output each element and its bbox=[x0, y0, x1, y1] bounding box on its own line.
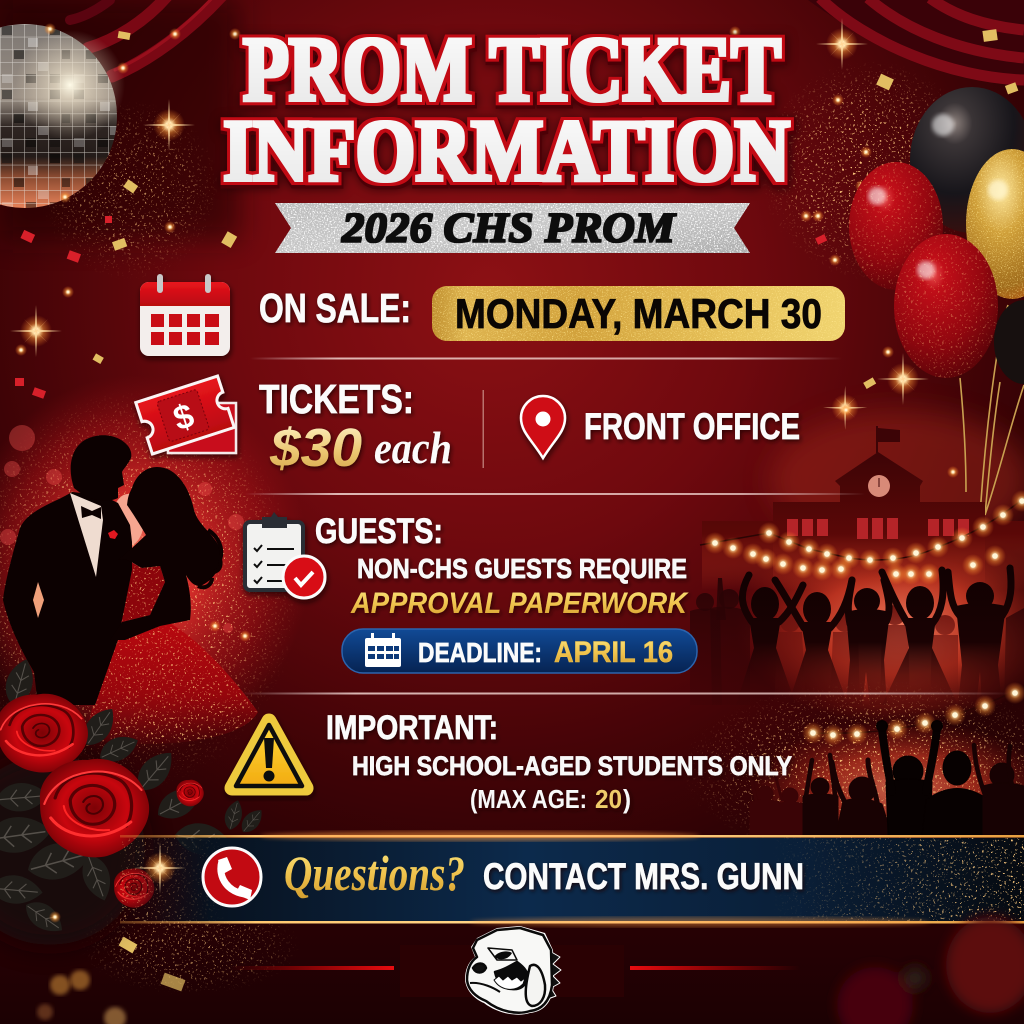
ticket price: $30 bbox=[269, 418, 362, 478]
icon: phone bbox=[203, 848, 261, 906]
guests requirement: NON-CHS GUESTS REQUIRE bbox=[357, 553, 687, 584]
header title bbox=[223, 18, 790, 200]
side figures bbox=[690, 578, 1024, 705]
date pill: MONDAY, MARCH 30 bbox=[455, 290, 822, 337]
on sale label: ON SALE: bbox=[259, 285, 411, 331]
contact name: CONTACT MRS. GUNN bbox=[483, 856, 804, 897]
ribbon banner bbox=[275, 203, 750, 253]
icon: check badge bbox=[283, 556, 325, 598]
curtain: top right bbox=[808, 0, 1024, 86]
location text: FRONT OFFICE bbox=[584, 406, 800, 447]
title line 1: PROM TICKET bbox=[243, 18, 781, 120]
icon: bulldog mascot bbox=[465, 926, 561, 1015]
roses bouquet bbox=[0, 656, 267, 945]
icon: clipboard bbox=[245, 512, 325, 598]
age rule: HIGH SCHOOL-AGED STUDENTS ONLY bbox=[352, 751, 792, 781]
max age: 20 bbox=[595, 784, 622, 814]
disco ball bbox=[0, 23, 125, 208]
couple silhouette bbox=[3, 435, 265, 755]
icon: calendar bbox=[140, 274, 230, 356]
man silhouette bbox=[3, 435, 132, 705]
icon: warning triangle bbox=[232, 721, 306, 788]
deadline date: APRIL 16 bbox=[554, 636, 673, 669]
deadline label: DEADLINE: bbox=[418, 637, 542, 668]
crowd silhouette: lower bbox=[750, 720, 1024, 836]
crowd silhouette: upper bbox=[690, 568, 1024, 705]
max age: (MAX AGE: bbox=[470, 784, 587, 814]
school silhouette bbox=[702, 426, 1024, 591]
balloons bbox=[845, 87, 1024, 515]
icon: location pin bbox=[521, 396, 565, 458]
icon: tickets: $ bbox=[169, 397, 199, 439]
title line 2: INFORMATION bbox=[223, 103, 790, 200]
icon: small calendar bbox=[365, 633, 401, 667]
footer mascot bbox=[230, 926, 800, 1015]
front figures bbox=[736, 568, 1011, 705]
questions script: Questions? bbox=[284, 845, 465, 901]
price unit: each bbox=[374, 422, 452, 473]
woman dress bbox=[89, 562, 258, 744]
tickets label: TICKETS: bbox=[259, 376, 414, 422]
contact band bbox=[49, 831, 1024, 927]
footer lines bbox=[230, 966, 800, 970]
ribbon text: 2026 CHS PROM bbox=[341, 206, 677, 252]
man shirt and bow tie bbox=[70, 493, 118, 577]
max age: ) bbox=[623, 784, 631, 814]
row: guests bbox=[245, 512, 697, 673]
row: important bbox=[232, 709, 792, 814]
important label: IMPORTANT: bbox=[326, 709, 498, 747]
approval paperwork: APPROVAL PAPERWORK bbox=[350, 587, 689, 620]
string lights: lower bbox=[802, 682, 1024, 746]
back row figures bbox=[774, 605, 958, 705]
row: on sale bbox=[140, 274, 845, 356]
woman silhouette bbox=[110, 467, 221, 640]
bottom roses blurred bbox=[837, 917, 1024, 1024]
string lights: upper bbox=[700, 490, 1024, 585]
guests label: GUESTS: bbox=[315, 512, 443, 551]
deadline pill bbox=[342, 629, 697, 673]
curtain: top left bbox=[70, 0, 222, 76]
icon: tickets bbox=[136, 376, 236, 454]
row: tickets and location bbox=[136, 376, 800, 478]
